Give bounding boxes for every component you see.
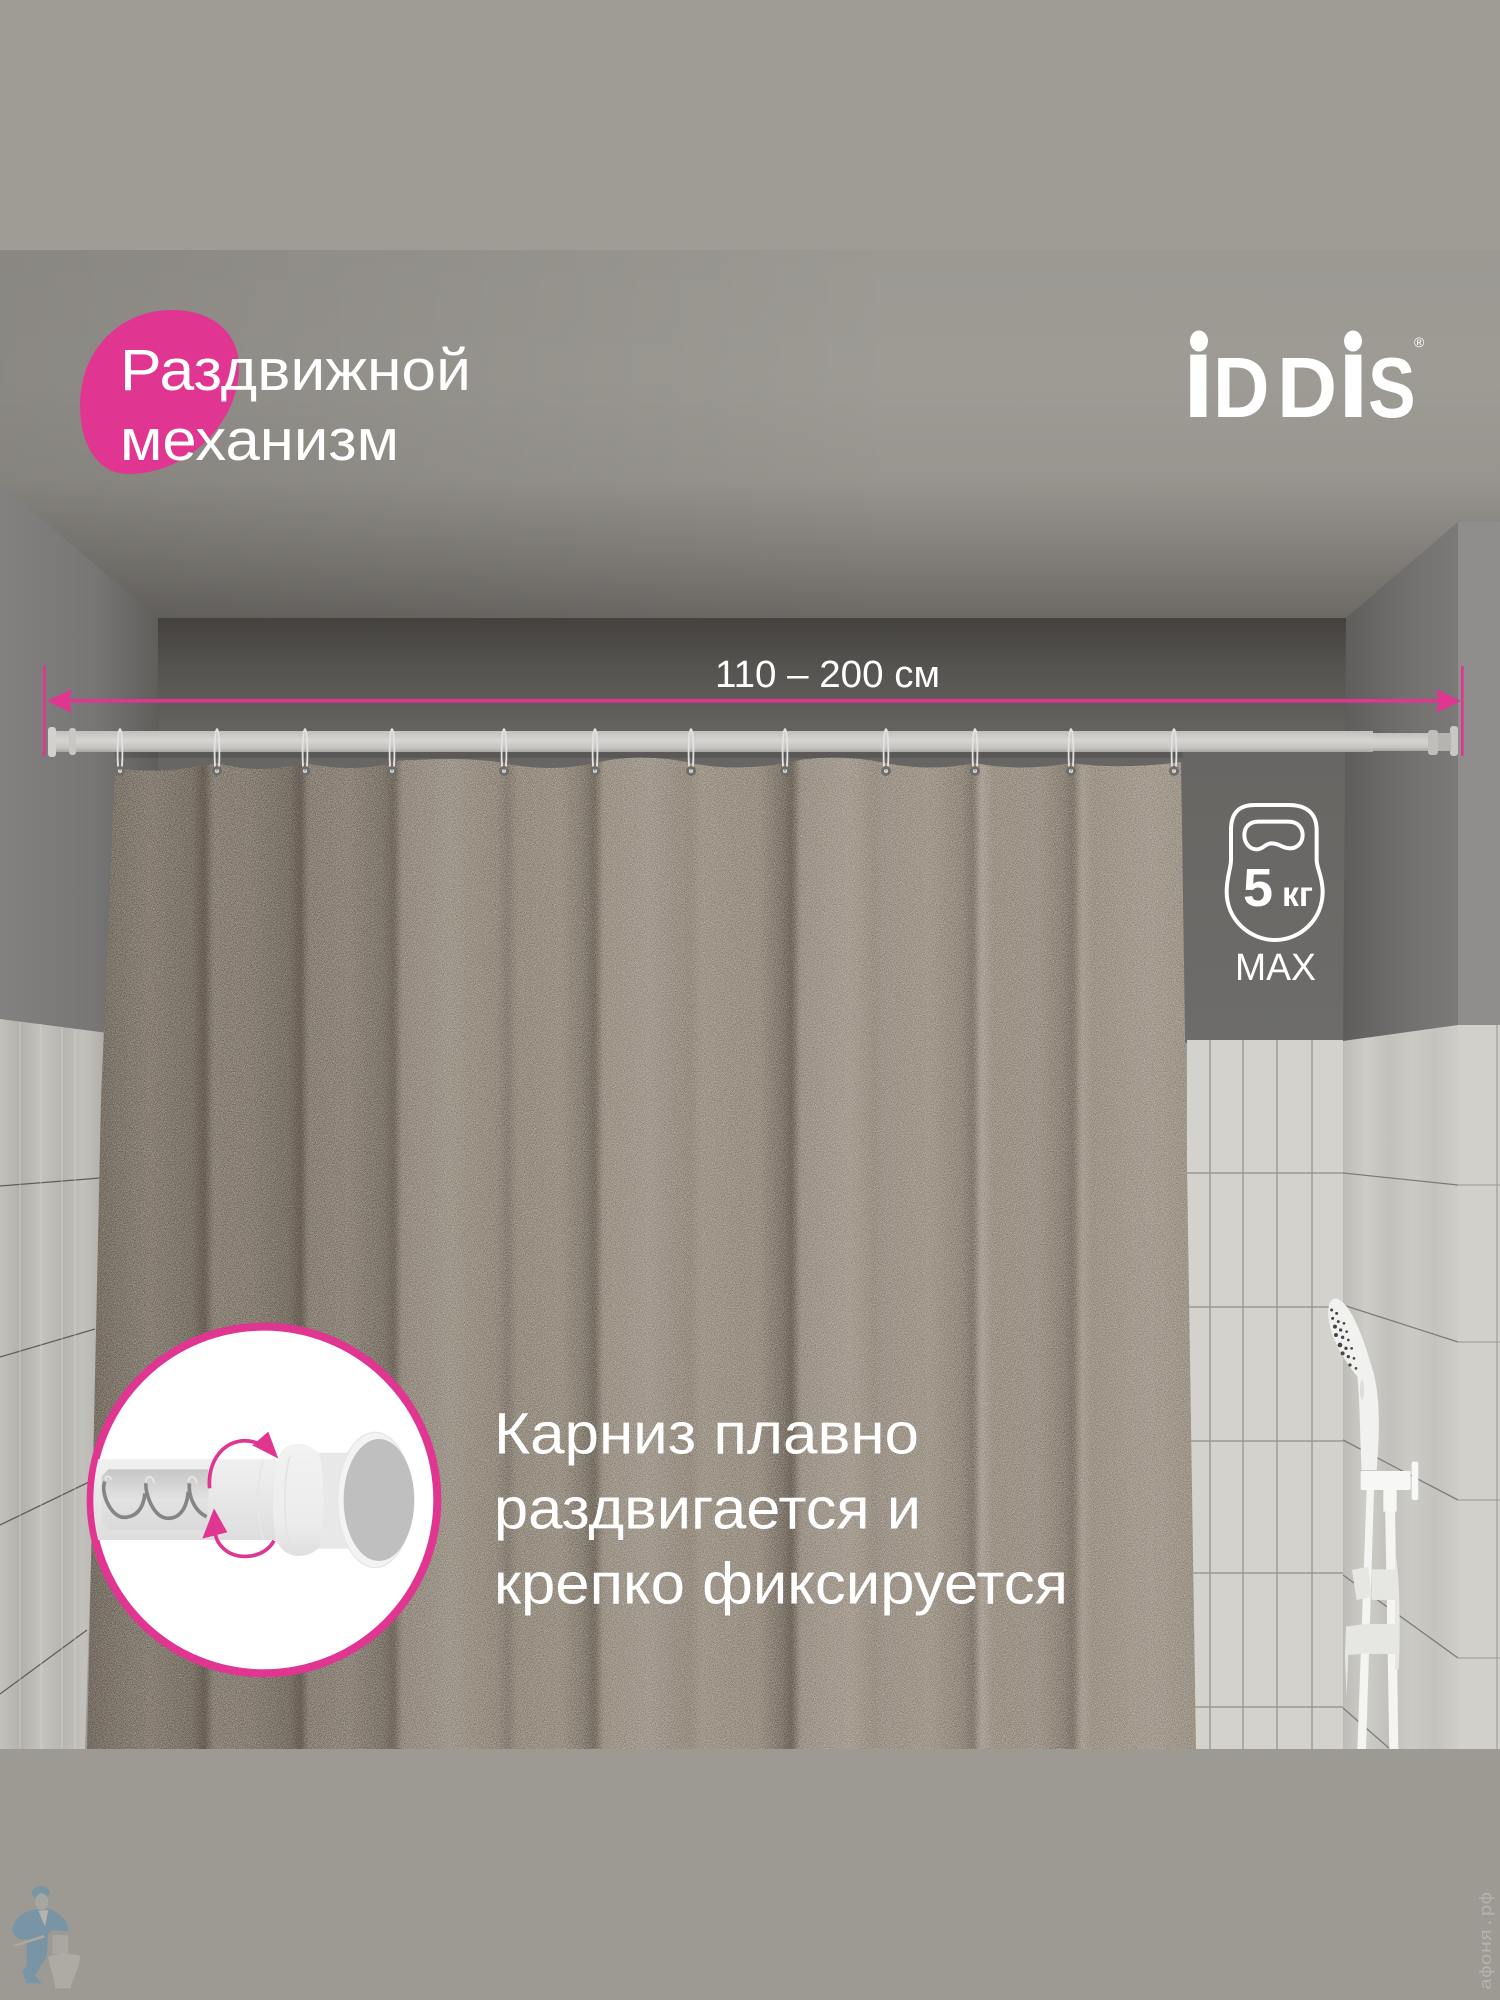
icon: kettlebell 5 kg: кг xyxy=(1282,875,1313,914)
right far wall xyxy=(1458,522,1500,1026)
logo: iDDiS: ® xyxy=(1414,334,1425,350)
logo: iDDiS: i xyxy=(1337,311,1370,443)
tiles: far right wall xyxy=(1458,1025,1500,1749)
icon: kettlebell 5 kg: 5 xyxy=(1243,858,1273,918)
caption xyxy=(494,1402,1068,1616)
dimension arrow xyxy=(43,666,1464,756)
watermark: plumber xyxy=(12,1886,80,1988)
curtain rod xyxy=(48,726,1458,758)
title: механизм xyxy=(120,408,399,473)
title xyxy=(120,338,471,473)
ceiling xyxy=(0,250,1500,619)
icon: kettlebell 5 kg xyxy=(1227,805,1323,989)
tube with spring window xyxy=(90,1459,277,1540)
right side wall xyxy=(1343,522,1458,1041)
caption: крепко фиксируется xyxy=(494,1552,1068,1616)
detail circle: spring mechanism xyxy=(90,1327,437,1673)
caption: Карниз плавно xyxy=(494,1402,919,1466)
icon: wall holder xyxy=(1361,1462,1418,1512)
title blob xyxy=(80,310,239,474)
tiles: back wall xyxy=(1187,1040,1343,1749)
shower set xyxy=(1328,1298,1418,1750)
title: Раздвижной xyxy=(120,338,471,403)
logo: iDDiS: D xyxy=(1213,341,1269,436)
tiles: right wall xyxy=(1343,1025,1458,1749)
tiles: left wall xyxy=(0,1019,108,1749)
icon: shower valves xyxy=(1345,1557,1400,1697)
icon: hand shower head xyxy=(1328,1298,1379,1470)
icon: hoses xyxy=(1357,1490,1398,1750)
collar and end cap xyxy=(258,1432,414,1568)
icon: kettlebell 5 kg: MAX xyxy=(1235,947,1316,989)
logo: iDDiS: D xyxy=(1277,340,1337,435)
logo: iDDiS xyxy=(1190,330,1424,418)
background: top band xyxy=(0,0,1500,251)
curtain rings xyxy=(116,729,1178,775)
background: bottom band xyxy=(0,1749,1500,2000)
left side wall xyxy=(0,484,158,1040)
caption: раздвигается и xyxy=(494,1476,921,1542)
rotation arrows xyxy=(202,1432,278,1556)
curtain xyxy=(70,750,1215,1750)
logo: iDDiS: S xyxy=(1368,340,1416,435)
dimension label: 110 – 200 см xyxy=(715,654,940,696)
back wall xyxy=(158,618,1346,1043)
logo: iDDiS: i xyxy=(1182,311,1215,443)
watermark: site name: афоня.рф xyxy=(1478,1892,1497,1990)
